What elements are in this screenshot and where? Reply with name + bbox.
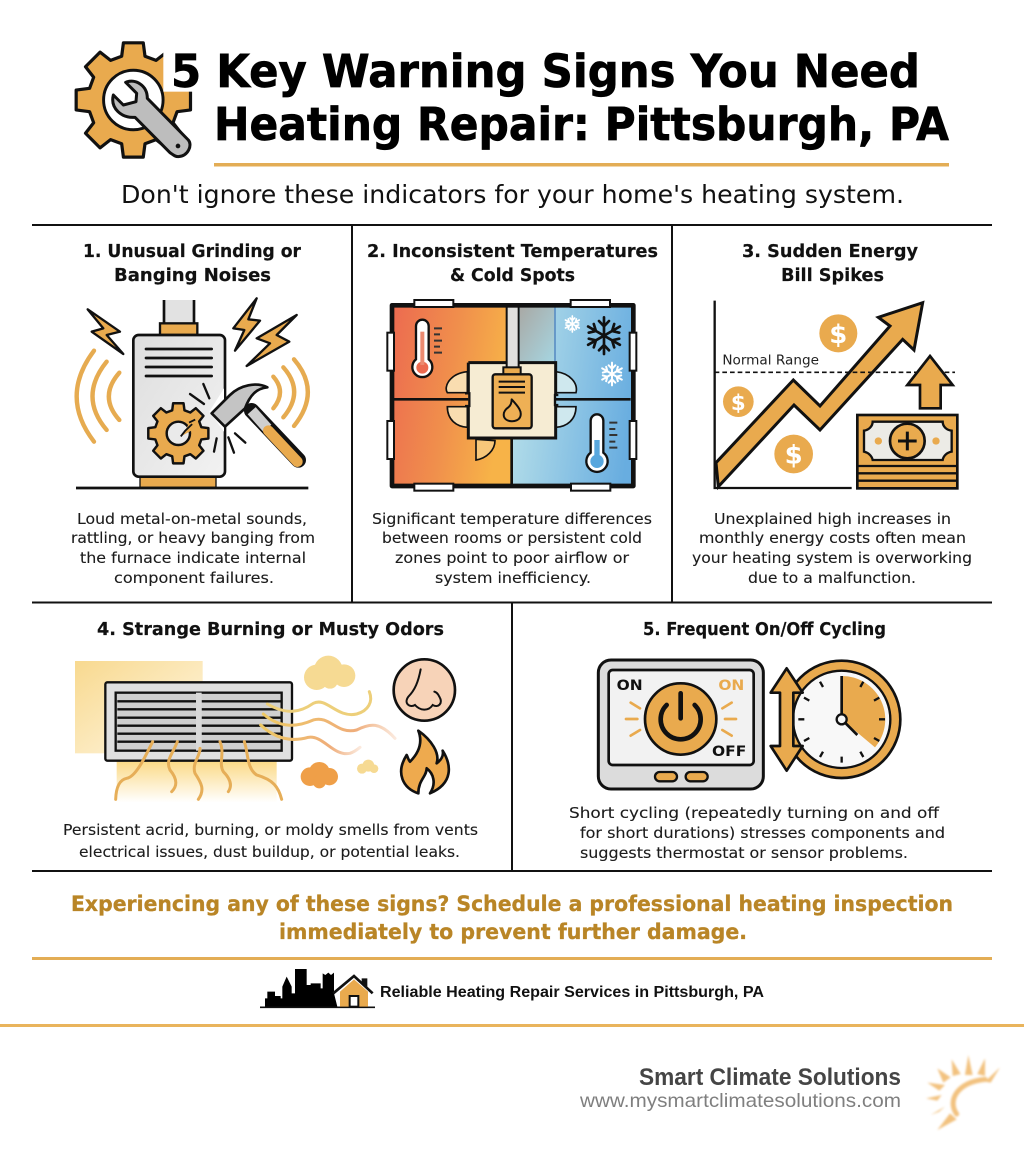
text block: sign 1: rattling, or heavy banging from (71, 529, 315, 547)
title: 5 Key Warning Signs You Need (171, 45, 920, 98)
heading: sign 5: 5. Frequent On/Off Cycling (643, 619, 886, 640)
icon: sun logo (926, 1055, 1000, 1130)
icon: thermostat and clock (598, 660, 900, 789)
brand name and url: www.mysmartclimatesolutions.com (579, 1090, 901, 1112)
chart: rising cost arrow: $ (829, 320, 847, 350)
text block: sign 5: suggests thermostat or sensor problems. (580, 844, 908, 862)
text block: sign 5 (569, 804, 945, 862)
text block: sign 1: component failures. (114, 569, 274, 587)
text block: sign 2: zones point to poor airflow or (395, 549, 630, 567)
brand name and url: Smart Climate Solutions (639, 1064, 901, 1091)
text block: sign 1: Loud metal-on-metal sounds, (77, 510, 307, 528)
text block: sign 4: electrical issues, dust buildup, or potential leaks. (79, 843, 460, 861)
heading: sign 1: Banging Noises (114, 265, 271, 286)
heading: sign 2: & Cold Spots (450, 265, 575, 286)
callout: schedule inspection: Experiencing any of these signs? Schedule a professional heating inspection (71, 892, 953, 916)
text block: sign 5: for short durations) stresses components and (580, 824, 945, 842)
heading: sign 3: Bill Spikes (781, 265, 884, 286)
heading: sign 3 (742, 241, 918, 286)
heading: sign 2: 2. Inconsistent Temperatures (367, 241, 658, 262)
panel: sign 5 short cycling (569, 619, 945, 862)
chart: rising cost arrow: $ (731, 391, 746, 416)
panel: sign 1 grinding noises (71, 241, 315, 587)
heading: sign 1: 1. Unusual Grinding or (83, 241, 301, 262)
panel: sign 4 odors (63, 619, 478, 861)
chart: rising cost arrow: $ (785, 441, 803, 471)
title: Heating Repair: Pittsburgh, PA (214, 98, 949, 151)
text block: sign 1 (71, 510, 315, 587)
icon: floor plan with furnace (387, 300, 636, 491)
text block: sign 4 (63, 821, 478, 861)
panel: sign 2 cold spots (367, 241, 658, 587)
icon: thermostat and clock: ON (718, 678, 744, 694)
text block: sign 3 (692, 510, 972, 587)
icon: furnace struck by hammer (76, 298, 308, 488)
chart: rising cost arrow: Normal Range (722, 353, 819, 368)
text block: sign 3: your heating system is overworking (692, 549, 972, 567)
chart: rising cost arrow (715, 301, 957, 488)
text block: sign 2: Significant temperature differences (372, 510, 652, 528)
text block: sign 3: due to a malfunction. (748, 569, 916, 587)
text block: sign 4: Persistent acrid, burning, or moldy smells from vents (63, 821, 478, 839)
text block: sign 2: system inefficiency. (435, 569, 591, 587)
heading: sign 2 (367, 241, 658, 286)
subtitle: Don't ignore these indicators for your home's heating system. (121, 180, 904, 209)
heading: sign 1 (83, 241, 301, 286)
text block: sign 5: Short cycling (repeatedly turning on and off (569, 804, 940, 822)
callout: schedule inspection (71, 892, 953, 944)
panel: sign 3 energy bill spikes (692, 241, 972, 587)
text block: sign 2 (372, 510, 652, 587)
heading: sign 4: 4. Strange Burning or Musty Odors (97, 619, 444, 640)
footer tagline: Reliable Heating Repair Services in Pittsburgh, PA (380, 984, 764, 1001)
icon: thermostat and clock: OFF (712, 744, 746, 760)
heading: sign 3: 3. Sudden Energy (742, 241, 918, 262)
text block: sign 2: between rooms or persistent cold (382, 529, 642, 547)
brand name and url (579, 1064, 901, 1112)
text block: sign 1: the furnace indicate internal (80, 549, 306, 567)
text block: sign 3: monthly energy costs often mean (699, 529, 966, 547)
text block: sign 3: Unexplained high increases in (714, 510, 951, 528)
icon: gear and wrench (76, 43, 199, 157)
icon: vent with odors, nose and flame (75, 656, 455, 802)
icon: pittsburgh skyline and house (260, 969, 375, 1007)
icon: thermostat and clock: ON (617, 678, 643, 694)
title (171, 45, 949, 151)
callout: schedule inspection: immediately to prevent further damage. (279, 920, 747, 944)
